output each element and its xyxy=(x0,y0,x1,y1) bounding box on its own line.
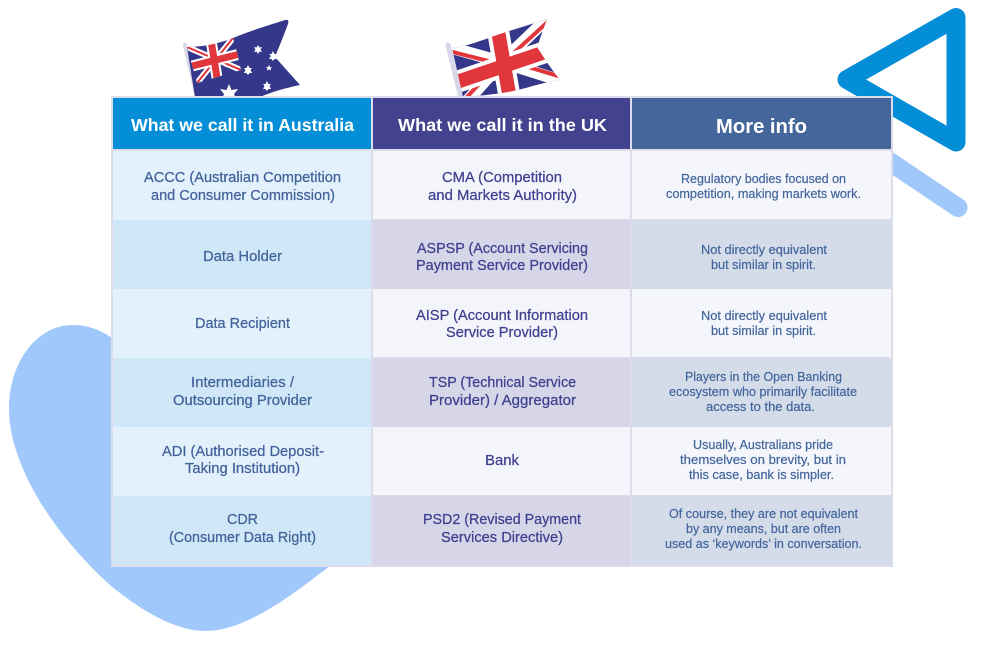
row: usually xyxy=(632,427,891,495)
row: regulatory bodies: Regulatory bodies focused on xyxy=(681,171,846,186)
row: ACCC: ACCC (Australian Competition xyxy=(144,169,341,186)
row: of course: by any means, but are often xyxy=(686,521,841,536)
column: Australia xyxy=(113,98,371,565)
row: players: Players in the Open Banking xyxy=(685,369,842,384)
row: Bank: Bank xyxy=(485,452,519,469)
row: CMA: and Markets Authority) xyxy=(428,187,577,204)
row: usually: this case, bank is simpler. xyxy=(689,467,834,482)
row: ASPSP xyxy=(373,220,630,289)
header: Australia: What we call it in Australia xyxy=(131,115,354,135)
row: ACCC: and Consumer Commission) xyxy=(151,187,335,204)
row: TSP: Provider) / Aggregator xyxy=(429,392,576,409)
row: of course: used as ‘keywords’ in conversation. xyxy=(665,536,862,551)
row: TSP: TSP (Technical Service xyxy=(429,374,576,391)
row: of course: Of course, they are not equivalent xyxy=(669,506,858,521)
row: players: ecosystem who primarily facilitate xyxy=(669,384,857,399)
background blob xyxy=(9,325,335,631)
decorative light blue bar xyxy=(880,155,958,208)
column: more info xyxy=(632,98,891,565)
row: CDR: CDR xyxy=(227,511,258,528)
comparison table xyxy=(111,96,893,567)
row: Intermediaries: Intermediaries / xyxy=(191,374,295,391)
row: players xyxy=(632,358,891,427)
row: TSP xyxy=(373,358,630,427)
row: ASPSP: Payment Service Provider) xyxy=(416,257,588,274)
row: not directly equivalent: but similar in spirit. xyxy=(711,257,816,272)
row: not directly equivalent: Not directly equivalent xyxy=(701,242,827,257)
row: Intermediaries xyxy=(113,358,371,427)
row: regulatory bodies xyxy=(632,151,891,219)
row: CDR xyxy=(113,496,371,565)
row: AISP: Service Provider) xyxy=(446,324,558,341)
icon: UK flag xyxy=(446,19,560,96)
row: regulatory bodies: competition, making markets work. xyxy=(666,186,861,201)
row: ADI: Taking Institution) xyxy=(185,460,300,477)
row: Data Recipient: Data Recipient xyxy=(195,315,291,332)
header: Australia xyxy=(113,98,371,149)
row: usually: Usually, Australians pride xyxy=(693,437,833,452)
row: PSD2 xyxy=(373,496,630,565)
row: not directly equivalent 2 xyxy=(632,289,891,357)
row: ADI: ADI (Authorised Deposit- xyxy=(162,443,324,460)
header: More info xyxy=(632,98,891,149)
row: PSD2: PSD2 (Revised Payment xyxy=(423,511,582,528)
row: ACCC xyxy=(113,151,371,220)
header: More info: More info xyxy=(716,116,807,138)
header: UK xyxy=(373,98,630,149)
icon: Australian flag xyxy=(185,20,300,99)
row: of course xyxy=(632,496,891,565)
row: CMA xyxy=(373,151,630,219)
row: ADI xyxy=(113,427,371,496)
row: Data Holder xyxy=(113,220,371,289)
row: Data Recipient xyxy=(113,289,371,358)
row: usually: themselves on brevity, but in xyxy=(680,452,846,467)
column: UK xyxy=(373,98,630,565)
row: ASPSP: ASPSP (Account Servicing xyxy=(417,240,588,257)
row: not directly equivalent 2: Not directly equivalent xyxy=(701,308,827,323)
row: Data Holder: Data Holder xyxy=(203,248,282,265)
row: CDR: (Consumer Data Right) xyxy=(169,529,316,546)
row: players: access to the data. xyxy=(706,399,815,414)
decorative blue triangle xyxy=(847,18,956,142)
row: not directly equivalent 2: but similar in spirit. xyxy=(711,323,816,338)
row: Bank xyxy=(373,427,630,495)
row: AISP xyxy=(373,289,630,357)
row: CMA: CMA (Competition xyxy=(442,169,562,186)
header: UK: What we call it in the UK xyxy=(398,115,607,135)
row: Intermediaries: Outsourcing Provider xyxy=(173,392,312,409)
row: not directly equivalent xyxy=(632,220,891,289)
row: PSD2: Services Directive) xyxy=(441,529,563,546)
row: AISP: AISP (Account Information xyxy=(416,307,588,324)
